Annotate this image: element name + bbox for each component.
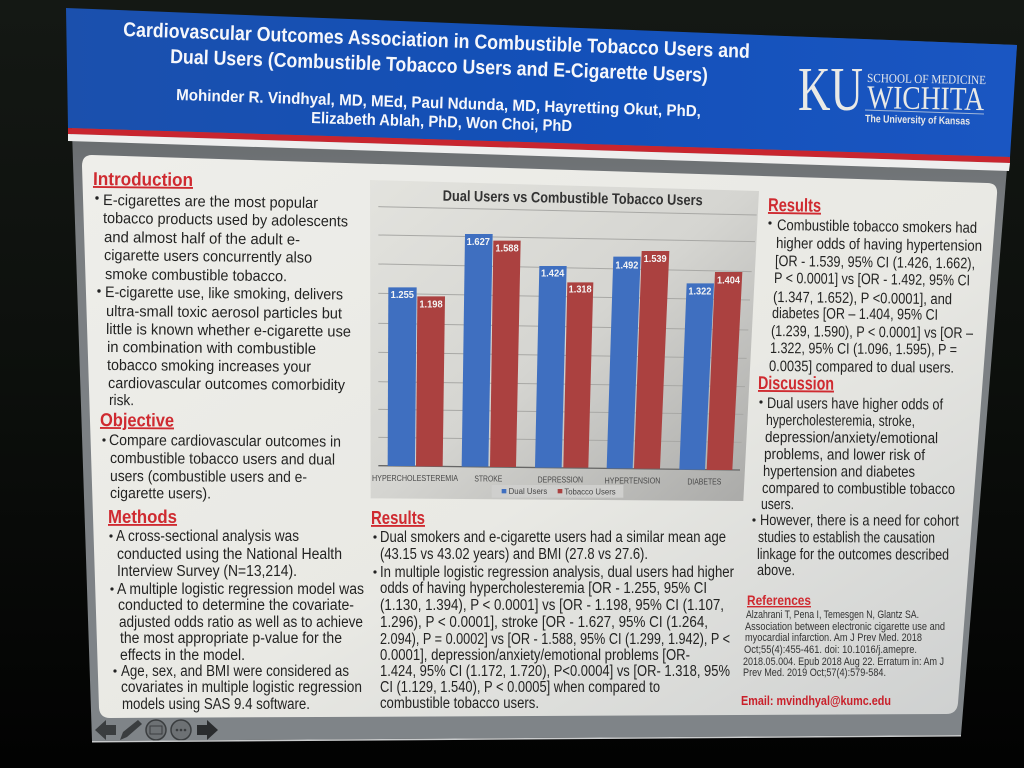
text block: results centre bullets: Dual smokers and e-cigarette users had a similar mean age xyxy=(380,529,726,546)
text block: methods bullets: A multiple logistic regression model was xyxy=(117,581,364,598)
category labels: STROKE xyxy=(474,475,502,484)
text block: introduction bullets: ultra-small toxic aerosol particles but xyxy=(106,303,343,322)
category labels: DEPRESSION xyxy=(538,475,583,484)
text block: methods bullets: conducted to determine the covariate- xyxy=(118,597,354,614)
heading: results right: Results xyxy=(768,194,821,216)
bars: hypertension xyxy=(607,251,669,469)
text block: introduction bullets xyxy=(95,192,351,409)
text block: methods bullets: covariates in multiple logistic regression xyxy=(121,679,362,696)
text block: discussion bullets: depression/anxiety/emotional xyxy=(765,429,938,447)
legend: Dual Users xyxy=(509,487,547,496)
bars: stroke: 1.588 xyxy=(495,244,519,255)
text block: methods bullets: A cross-sectional analysis was xyxy=(116,528,299,545)
text block: methods bullets: models using SAS 9.4 software. xyxy=(122,696,310,713)
icon: more options xyxy=(171,720,191,740)
text block: objective bullet: combustible tobacco users and dual xyxy=(110,450,335,469)
heading: methods: Methods xyxy=(108,506,177,527)
panel: introduction xyxy=(93,168,351,409)
text block: reference citation: Alzahrani T, Pena I, Temesgen N, Glantz SA. xyxy=(746,609,919,621)
text block: discussion bullets: above. xyxy=(757,562,795,579)
text block: results centre bullets: combustible tobacco users. xyxy=(380,695,539,712)
text block: results right: [OR - 1.539, 95% CI (1.426, 1.662), xyxy=(775,253,975,272)
text block: reference citation: Oct;55(4):455-461. doi: 10.1016/j.amepre. xyxy=(744,644,917,656)
authors: Elizabeth Ablah, PhD, Won Choi, PhD xyxy=(311,110,572,135)
category labels: HYPERCHOLESTEREMIA xyxy=(372,474,459,483)
heading: objective: Objective xyxy=(100,409,174,431)
text block: results centre bullets: In multiple logistic regression analysis, dual users had higher xyxy=(380,564,734,581)
text block: results centre bullets: odds of having hypercholesteremia [OR - 1.255, 95% CI xyxy=(380,580,707,597)
category labels xyxy=(372,474,721,486)
text block: results right: (1.239, 1.590), P < 0.0001] vs [OR – xyxy=(771,323,974,342)
text block: introduction bullets: cardiovascular outcomes comorbidity xyxy=(108,375,345,394)
heading: results centre: Results xyxy=(371,507,425,528)
text block: objective bullet: cigarette users). xyxy=(110,485,211,503)
text block: methods bullets: the most appropriate p-value for the xyxy=(120,630,342,647)
bars: stroke xyxy=(462,234,521,467)
text block: results centre bullets: (43.15 vs 43.02 years) and BMI (27.8 vs 27.6). xyxy=(380,546,648,563)
logo: KU School of Medicine Wichita: The University of Kansas xyxy=(865,113,970,128)
bars: hypercholesteremia xyxy=(388,287,445,466)
text block: objective bullet: Compare cardiovascular outcomes in xyxy=(109,432,341,451)
text block: discussion bullets: studies to establish the causation xyxy=(758,529,935,547)
text block: reference citation: myocardial infarction. Am J Prev Med. 2018 xyxy=(745,632,922,644)
legend xyxy=(492,485,623,498)
email contact: Email: mvindhyal@kumc.edu xyxy=(741,694,891,708)
heading: introduction: Introduction xyxy=(93,168,193,190)
text block: methods bullets xyxy=(109,528,364,713)
text block: results right: 0.0035] compared to dual users. xyxy=(769,358,954,377)
text block: introduction bullets: tobacco smoking increases your xyxy=(107,357,311,376)
title: Dual Users (Combustible Tobacco Users and E-Cigarette Users) xyxy=(170,46,708,87)
text block: results centre bullets: 0.0001], depression/anxiety/emotional problems [OR- xyxy=(380,647,690,664)
heading: references: References xyxy=(747,592,811,608)
text block: discussion bullets: compared to combustible tobacco xyxy=(762,480,955,498)
bars: diabetes: 1.322 xyxy=(688,286,711,297)
text block: methods bullets: Age, sex, and BMI were considered as xyxy=(121,663,349,680)
text block: introduction bullets: risk. xyxy=(109,392,134,409)
text block: results centre bullets: 1.424, 95% CI (1.172, 1.720), P<0.0004] vs [OR- 1.318, 95% xyxy=(380,663,730,680)
text block: reference citation: 2018.05.004. Epub 2018 Aug 22. Erratum in: Am J xyxy=(743,656,944,668)
icon: pen xyxy=(120,720,142,740)
header band xyxy=(66,8,1017,171)
authors: Mohinder R. Vindhyal, MD, MEd, Paul Ndunda, MD, Hayretting Okut, PhD, xyxy=(176,87,701,120)
bars: diabetes: 1.404 xyxy=(717,275,741,286)
text block: introduction bullets: smoke combustible tobacco. xyxy=(105,266,287,285)
text block: methods bullets: Interview Survey (N=13,214). xyxy=(117,563,297,580)
chart background xyxy=(370,180,759,501)
text block: results right xyxy=(768,217,982,377)
bars: depression: 1.424 xyxy=(541,269,565,280)
text block: reference citation: Prev Med. 2019 Oct;57(4):579-584. xyxy=(743,667,886,679)
panel: methods xyxy=(108,506,364,713)
bars: depression xyxy=(535,266,593,468)
logo: KU School of Medicine Wichita: KU xyxy=(798,56,863,124)
panel: discussion xyxy=(752,372,960,579)
text block: results right: higher odds of having hypertension xyxy=(776,235,982,255)
text block: methods bullets: adjusted odds ratio as well as to achieve xyxy=(119,614,363,631)
text block: introduction bullets: E-cigarette use, like smoking, delivers xyxy=(105,284,343,303)
text block: introduction bullets: tobacco products used by adolescents xyxy=(103,210,348,230)
bars: depression: 1.318 xyxy=(569,285,592,296)
logo: KU School of Medicine Wichita: SCHOOL OF MEDICINE xyxy=(867,71,986,87)
category labels: DIABETES xyxy=(687,477,721,486)
text block: objective bullet xyxy=(102,432,341,503)
bars: hypercholesteremia: 1.198 xyxy=(419,299,443,310)
slide bottom edge xyxy=(92,735,961,742)
text block: introduction bullets: in combination with combustible xyxy=(107,339,316,358)
panel: objective xyxy=(100,409,341,503)
text block: discussion bullets: hypercholesteremia, stroke, xyxy=(766,412,915,430)
chart title: Dual Users vs Combustible Tobacco Users xyxy=(443,188,703,209)
text block: objective bullet: users (combustible users and e- xyxy=(110,468,307,486)
text block: discussion bullets: However, there is a need for cohort xyxy=(760,512,960,530)
text block: results centre bullets: (1.130, 1.394), P < 0.0001] vs [OR - 1.198, 95% CI (1.107, xyxy=(380,597,724,614)
content panel xyxy=(82,155,997,718)
text block: results right: (1.347, 1.652), P <0.0001], and xyxy=(773,289,952,308)
text block: introduction bullets: E-cigarettes are the most popular xyxy=(103,192,318,212)
icon: back arrow xyxy=(95,720,116,740)
text block: discussion bullets: hypertension and diabetes xyxy=(763,463,915,481)
text block: discussion bullets: linkage for the outcomes described xyxy=(757,546,949,564)
text block: results centre bullets: CI (1.129, 1.540), P < 0.0005] when compared to xyxy=(380,679,660,696)
logo: KU School of Medicine Wichita: WICHITA xyxy=(867,80,985,118)
text block: methods bullets: effects in the model. xyxy=(120,647,245,664)
legend: Tobacco Users xyxy=(564,488,616,497)
text block: results right: P < 0.0001] vs [OR - 1.492, 95% CI xyxy=(774,270,970,289)
text block: reference citation: Association between electronic cigarette use and xyxy=(745,621,945,633)
category labels: HYPERTENSION xyxy=(605,476,661,485)
text block: results centre bullets: 2.094), P = 0.0002] vs [OR - 1.588, 95% CI (1.299, 1.942), P < xyxy=(380,631,730,648)
text block: results centre bullets: 1.296), P < 0.0001], stroke [OR - 1.627, 95% CI (1.264, xyxy=(380,614,708,631)
text block: introduction bullets: and almost half of the adult e- xyxy=(104,229,300,249)
bar chart: dual users vs combustible tobacco users xyxy=(370,180,759,501)
bars: hypertension: 1.492 xyxy=(615,260,638,271)
slide navigation icons xyxy=(95,720,218,740)
text block: introduction bullets: cigarette users concurrently also xyxy=(104,247,312,267)
text block: discussion bullets: users. xyxy=(761,496,794,513)
text block: discussion bullets: problems, and lower risk of xyxy=(764,446,926,464)
text block: introduction bullets: little is known whether e-cigarette use xyxy=(106,321,351,341)
text block: results centre bullets xyxy=(373,529,734,712)
icon: slides menu xyxy=(146,720,166,740)
panel: results (centre) xyxy=(371,507,734,712)
authors xyxy=(176,87,701,135)
bars: diabetes xyxy=(679,272,742,470)
text block: results right: Combustible tobacco smokers had xyxy=(777,217,977,237)
text block: results right: diabetes [OR – 1.404, 95% CI xyxy=(772,305,938,324)
text block: discussion bullets xyxy=(752,395,960,579)
text block: discussion bullets: Dual users have higher odds of xyxy=(767,395,944,414)
logo: KU School of Medicine Wichita xyxy=(798,56,986,128)
panel: references xyxy=(741,592,945,708)
icon: forward arrow xyxy=(197,720,218,740)
panel: results (right) xyxy=(768,194,982,377)
text block: methods bullets: conducted using the National Health xyxy=(117,546,342,563)
title: Cardiovascular Outcomes Association in Combustible Tobacco Users and xyxy=(123,19,750,63)
bars: hypercholesteremia: 1.255 xyxy=(391,290,415,301)
text block: reference citation xyxy=(743,609,945,679)
title xyxy=(123,19,750,87)
text block: results right: 1.322, 95% CI (1.096, 1.595), P = xyxy=(770,340,957,359)
bars: hypertension: 1.539 xyxy=(644,254,667,265)
bars: stroke: 1.627 xyxy=(467,237,490,248)
heading: discussion: Discussion xyxy=(758,372,834,394)
